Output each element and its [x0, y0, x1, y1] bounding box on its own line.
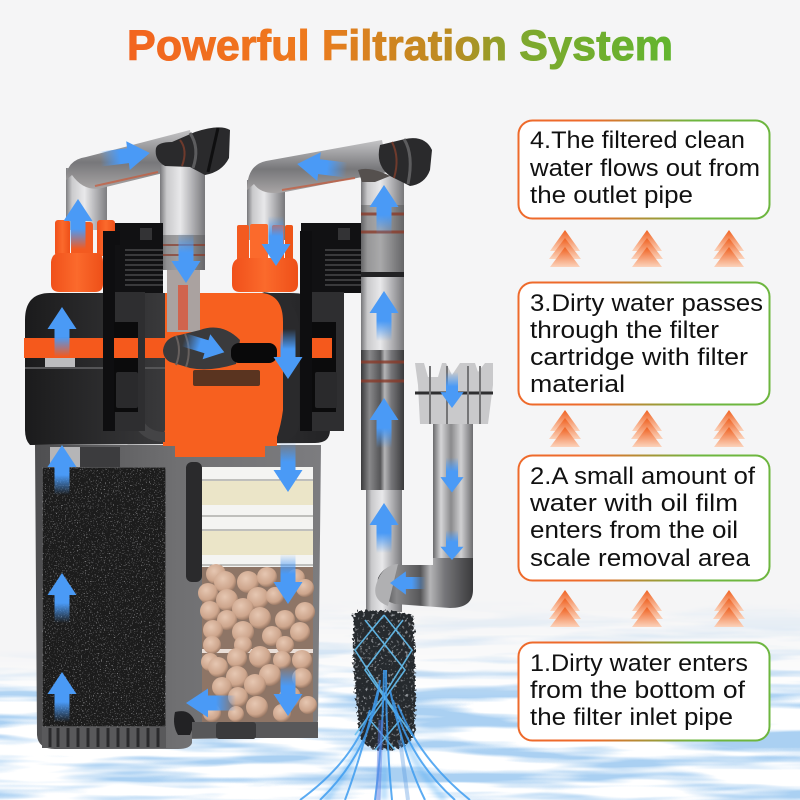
arrow: nozzle: [180, 327, 228, 365]
title: Powerful Filtration System: [127, 22, 673, 70]
right outlet tube: [247, 140, 388, 240]
arrow: left tube right: [98, 139, 152, 173]
main pump body: [24, 292, 330, 457]
arrow: media down 2: [274, 554, 302, 604]
panel: step 4: water flows out from: [529, 155, 760, 182]
flow arrows: [48, 139, 464, 722]
arrow: right tube left: [295, 150, 349, 184]
left outlet tube: [66, 130, 196, 230]
orange band: [24, 338, 166, 358]
arrow: skimmer crown down: [440, 372, 464, 408]
panel: step 4: the outlet pipe: [530, 182, 693, 209]
arrow: drop tube down: [172, 233, 200, 283]
orange centre cover: [163, 293, 283, 457]
right orange knob: [232, 224, 298, 292]
water left edge fade: [0, 600, 38, 690]
ceramic balls: [198, 564, 317, 722]
black mounting block left: [103, 223, 163, 293]
panel: step 2: water with oil film: [529, 490, 738, 517]
arrow: left riser up: [64, 199, 92, 249]
drop tube: [160, 165, 205, 270]
inlet sponge with mesh: [353, 611, 415, 750]
panel: step 3: through the filter: [530, 317, 719, 344]
filter media layers: [202, 467, 313, 567]
arrow: sponge up 3: [48, 672, 76, 722]
arrow: pipe up 1: [370, 185, 398, 235]
panel: step 1: from the bottom of: [530, 677, 745, 704]
elbow tube into body: [163, 270, 240, 369]
outlet nozzle: [231, 343, 277, 363]
arrow: media down 3: [274, 666, 302, 716]
surface skimmer tube: [375, 420, 473, 608]
panel: step 2: enters from the oil: [530, 517, 738, 544]
arrows: step 1 to 2: [549, 590, 745, 627]
panel: step 3: [518, 282, 770, 404]
panel: step 4: 4.The filtered clean: [530, 127, 745, 154]
water intake streams glow: [325, 670, 445, 800]
panel: step 2: 2.A small amount of: [530, 463, 755, 490]
left pipe cap: [156, 127, 230, 175]
arrow: body up: [48, 307, 76, 357]
black mounting block right: [301, 223, 361, 293]
lower tank: [35, 445, 321, 749]
arrow: skimmer elbow left: [390, 571, 426, 595]
right tall inlet pipe: [361, 175, 404, 612]
panel: step 1: 1.Dirty water enters: [530, 650, 748, 677]
sponge ribbed base: [42, 727, 166, 748]
left clamp: [103, 231, 145, 431]
panel: step 3: material: [530, 371, 625, 398]
arrows: step 3 to 4: [549, 230, 745, 267]
arrow: sponge up 1: [48, 445, 76, 495]
right pipe cap: [358, 138, 432, 186]
panel: step 4: [518, 120, 770, 218]
water surface: [0, 600, 800, 800]
right orange band: [300, 338, 330, 358]
foam sponge: [42, 467, 166, 727]
filter unit: [24, 127, 493, 800]
arrow: sponge up 2: [48, 573, 76, 623]
slot: [193, 370, 260, 386]
water intake streams: [300, 670, 470, 800]
arrow: right knob down: [262, 216, 290, 266]
panel: step 3: cartridge with filter: [530, 344, 748, 371]
arrow: skimmer lower down: [440, 530, 464, 560]
left orange knob: [51, 220, 115, 292]
panel: step 1: the filter inlet pipe: [530, 704, 733, 731]
arrow: skimmer down: [440, 458, 464, 492]
arrow: pipe up 4: [370, 503, 398, 553]
arrow: media down 1: [274, 442, 302, 492]
arrows: step 2 to 3: [549, 410, 745, 447]
arrow: body down: [274, 329, 302, 379]
arrow: return left: [186, 688, 236, 718]
arrow: pipe up 3: [370, 398, 398, 448]
panel: step 1: [518, 642, 770, 740]
arrow: pipe up 2: [370, 291, 398, 341]
panel: step 2: scale removal area: [530, 545, 751, 572]
dark wrap around cover: [262, 292, 299, 443]
right clamp: [300, 231, 344, 431]
skimmer crown: [415, 363, 493, 424]
panel: step 2: [518, 456, 770, 580]
panel: step 3: 3.Dirty water passes: [530, 290, 763, 317]
